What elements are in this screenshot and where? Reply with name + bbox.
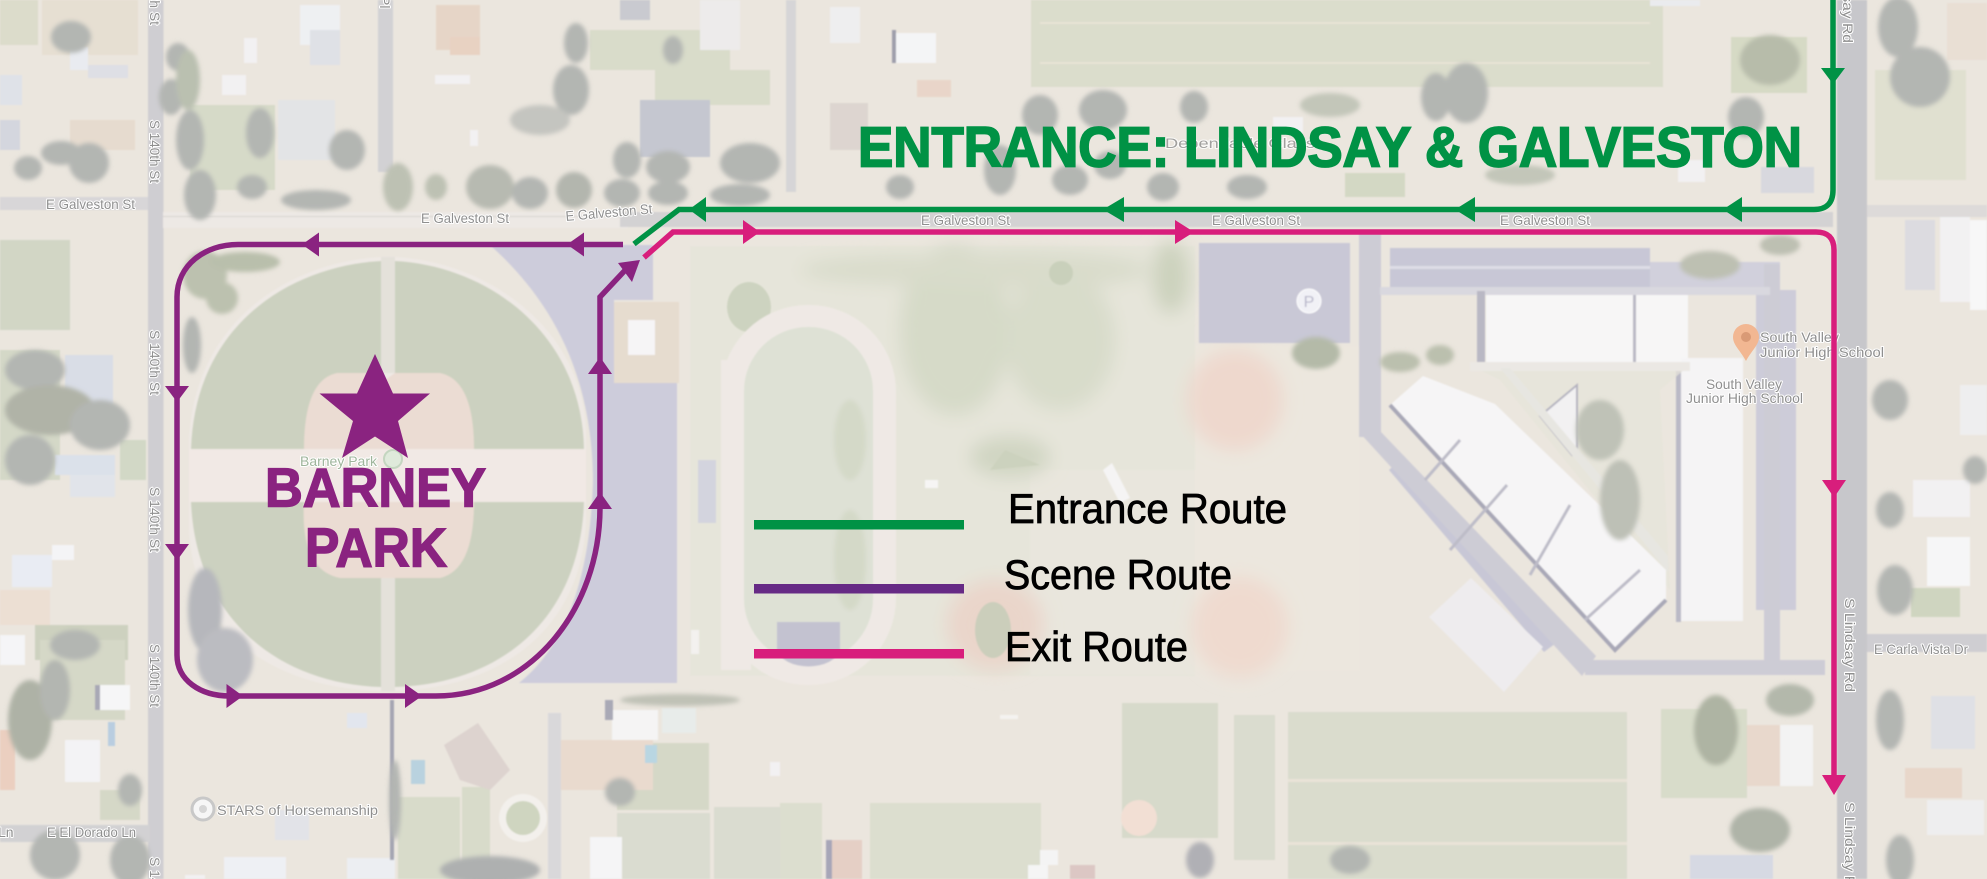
running track bbox=[691, 305, 896, 685]
map labels: E Galveston St bbox=[1212, 212, 1300, 228]
parking lots bbox=[490, 243, 1796, 683]
map labels: Junior High School bbox=[1686, 390, 1803, 406]
map labels: E Galveston St bbox=[565, 200, 653, 224]
legend: scene route: Scene Route bbox=[1004, 551, 1232, 598]
title: Barney Park bbox=[265, 456, 486, 578]
map labels: Junior High School bbox=[1760, 344, 1884, 360]
legend: exit route bbox=[754, 623, 1188, 670]
map labels: S 140th St bbox=[147, 487, 163, 552]
map labels: Barney Park bbox=[300, 453, 378, 469]
legend: entrance route bbox=[754, 485, 1287, 532]
title: Barney Park: BARNEY bbox=[265, 456, 486, 518]
map labels: E El Dorado Ln bbox=[47, 824, 136, 840]
map labels: S 140th St bbox=[147, 330, 163, 395]
icon: park place marker bbox=[384, 450, 402, 468]
infield mound and pads bbox=[925, 463, 1157, 836]
map labels: STARS of Horsemanship bbox=[217, 802, 378, 818]
exit route: magenta line bbox=[644, 220, 1846, 795]
map labels: E Galveston St bbox=[1500, 212, 1590, 228]
map labels: Dependable Glass bbox=[1165, 135, 1315, 151]
park fields bbox=[189, 257, 679, 691]
legend: exit route: Exit Route bbox=[1005, 623, 1188, 670]
icon: stars of horsemanship marker bbox=[192, 798, 214, 820]
legend bbox=[754, 485, 1287, 670]
central sports fields bbox=[690, 241, 1360, 677]
arrows: scene route bbox=[165, 232, 640, 708]
map labels: E Carla Vista Dr bbox=[1874, 641, 1968, 657]
map labels: S Lindsay Rd bbox=[1842, 598, 1858, 692]
map labels: S 140th St bbox=[147, 644, 163, 707]
icon: Barney Park star bbox=[320, 354, 430, 458]
school buildings bbox=[1390, 291, 1743, 692]
map labels: E Galveston St bbox=[46, 196, 135, 212]
map labels: South Valley bbox=[1760, 329, 1839, 345]
entrance route: green line bbox=[634, 0, 1845, 244]
map labels: S 140th St bbox=[147, 120, 163, 183]
parking lots: P bbox=[1304, 294, 1314, 311]
map labels: South Valley bbox=[1706, 376, 1782, 392]
heading: entrance location: ENTRANCE: LINDSAY & GALVESTON bbox=[858, 116, 1802, 178]
scene route: purple loop bbox=[165, 232, 640, 708]
icon: school map pin bbox=[1733, 324, 1759, 361]
legend: entrance route: Entrance Route bbox=[1008, 485, 1287, 532]
map labels: E Galveston St bbox=[421, 210, 509, 226]
title: Barney Park: PARK bbox=[305, 516, 447, 578]
legend: scene route bbox=[754, 551, 1232, 598]
arrows: exit route bbox=[743, 220, 1846, 795]
arrows: entrance route bbox=[689, 68, 1845, 222]
map labels: E Galveston St bbox=[921, 212, 1010, 228]
